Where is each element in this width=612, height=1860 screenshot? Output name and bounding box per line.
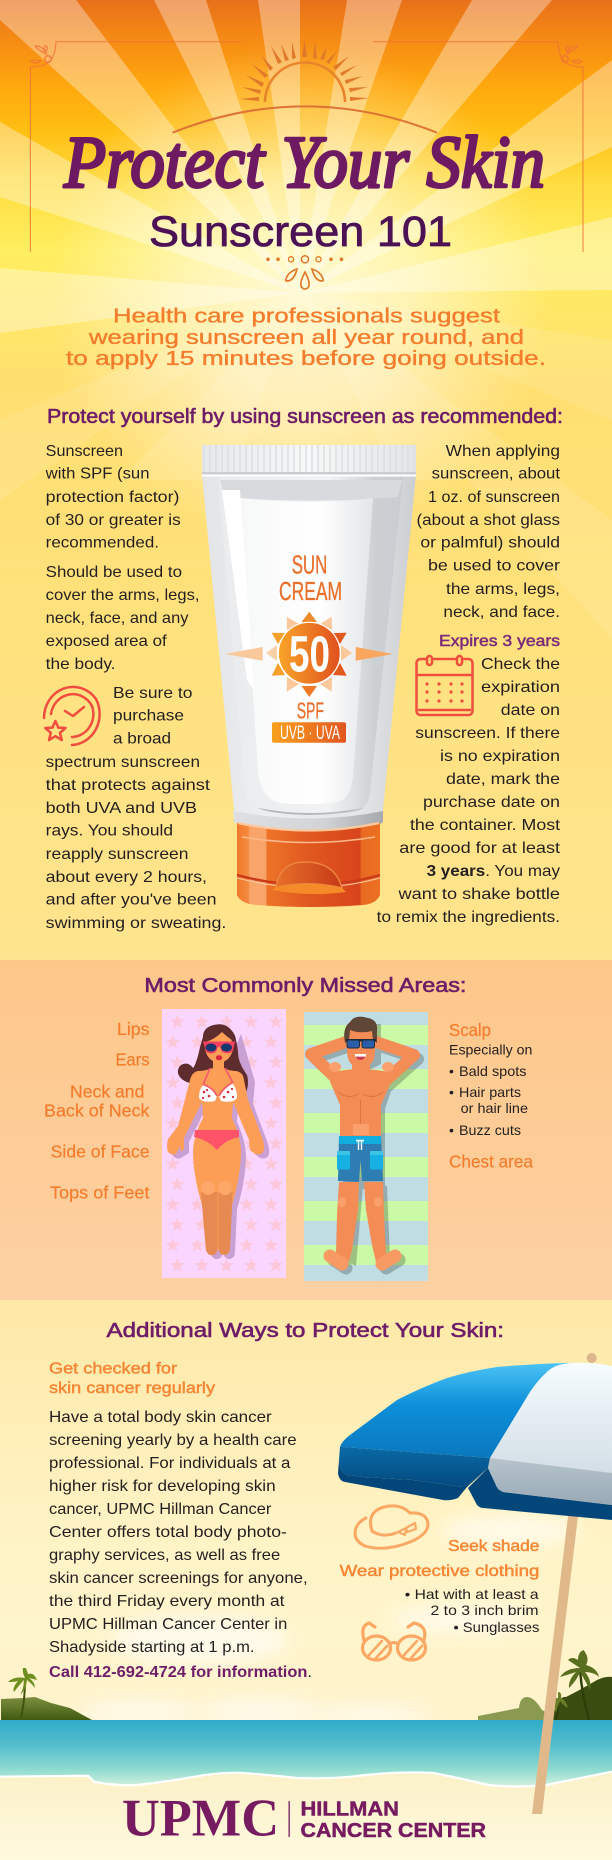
subheading: get checked: skin cancer regularly — [49, 1380, 215, 1397]
woman lower legs — [201, 1192, 233, 1255]
left labels: Lips — [117, 1019, 150, 1039]
bikini bottom — [194, 1130, 239, 1150]
heading: protect yourself: Protect yourself by using sunscreen as recommended: — [47, 406, 563, 428]
panel: most commonly missed areas background — [0, 960, 612, 1300]
man torso — [330, 1069, 392, 1137]
text: seek shade and wear protective clothing: • Hat with at least a — [405, 1586, 539, 1602]
screening text: cancer, UPMC Hillman Cancer — [49, 1501, 272, 1518]
tube crimp — [202, 445, 416, 476]
left column text: the body. — [46, 656, 116, 673]
swim shorts — [337, 1136, 383, 1182]
sunscreen tube — [202, 445, 416, 907]
right labels: or hair line — [461, 1100, 528, 1116]
panel: hero sunburst background — [0, 0, 612, 960]
left column text: with SPF (sun — [45, 466, 150, 483]
sea — [0, 1720, 612, 1786]
left column text: recommended. — [46, 534, 159, 552]
right column text — [377, 443, 561, 926]
text: sun cream: SUN — [292, 549, 327, 579]
left labels: Back of Neck — [44, 1101, 150, 1121]
right labels: Bald spots — [459, 1063, 526, 1079]
text: seek shade and wear protective clothing: Seek shade — [448, 1538, 540, 1555]
right column text: sunscreen. If there — [415, 725, 560, 742]
icon: sun hat — [355, 1506, 428, 1548]
subheading: get checked — [49, 1361, 215, 1397]
umbrella white panel — [490, 1363, 612, 1473]
woman fringe — [203, 1026, 236, 1042]
right column text: date on — [501, 702, 560, 719]
left column text: Sunscreen — [46, 443, 123, 460]
left column text: a broad — [113, 731, 171, 748]
beach scene — [0, 1650, 612, 1860]
screening text — [49, 1409, 312, 1681]
man arms — [311, 1042, 414, 1082]
screening text: the third Friday every month at — [49, 1593, 285, 1610]
man sunglasses — [346, 1039, 376, 1048]
man neck and face — [347, 1030, 375, 1074]
right labels — [449, 1020, 533, 1172]
striped towel — [304, 1012, 428, 1281]
left column text: exposed area of — [46, 633, 167, 650]
screening text: screening yearly by a health care — [49, 1432, 297, 1449]
woman hair — [178, 1024, 248, 1092]
umbrella pole — [532, 1353, 597, 1814]
UPMC wordmark: UPMC — [122, 1790, 279, 1848]
left column text: that protects against — [46, 777, 211, 794]
towel with stars — [162, 1009, 286, 1278]
panel: additional ways background — [0, 1300, 612, 1726]
heading: missed areas: Most Commonly Missed Areas: — [144, 975, 466, 997]
left column text: and after you've been — [46, 892, 217, 909]
logo: UPMC Hillman Cancer Center: HILLMAN — [300, 1798, 399, 1820]
intro text — [66, 305, 546, 370]
woman shadow — [172, 1034, 269, 1259]
text: sun cream: CREAM — [279, 576, 342, 606]
screening text: Call 412-692-4724 for information . — [49, 1664, 312, 1681]
ornament under subtitle — [266, 256, 343, 289]
tube lower band — [233, 811, 383, 833]
left column text: about every 2 hours, — [46, 869, 207, 886]
left column text: spectrum sunscreen — [46, 754, 200, 771]
woman body — [167, 1058, 264, 1255]
right column text: the arms, legs, — [446, 581, 560, 598]
left column text: protection factor) — [46, 489, 180, 506]
right column text: be used to cover — [428, 558, 561, 575]
woman sunglasses — [203, 1042, 235, 1054]
icon: rising sun — [172, 39, 437, 133]
right column text: When applying — [446, 443, 560, 460]
right column text: neck, and face. — [443, 604, 560, 621]
tube cap — [237, 823, 380, 907]
text: seek shade and wear protective clothing: 2 to 3 inch brim — [430, 1602, 538, 1618]
man hair — [344, 1017, 377, 1043]
screening text: Have a total body skin cancer — [49, 1409, 272, 1426]
left column text — [45, 443, 226, 932]
right column text: to remix the ingredients. — [377, 909, 560, 926]
logo: UPMC Hillman Cancer Center: CANCER CENTER — [300, 1820, 487, 1842]
woman mouth — [216, 1055, 222, 1060]
subtitle: Sunscreen 101 — [149, 208, 452, 256]
header frame ornament left — [30, 42, 241, 252]
icon: sunglasses — [362, 1623, 426, 1660]
right labels: • — [449, 1122, 454, 1138]
text: seek shade and wear protective clothing: Wear protective clothing — [340, 1563, 539, 1580]
island left with palm — [1, 1668, 92, 1720]
screening text: UPMC Hillman Cancer Center in — [49, 1616, 287, 1633]
right labels: • — [449, 1063, 454, 1079]
left column text: cover the arms, legs, — [46, 587, 200, 604]
right labels: • — [449, 1084, 454, 1100]
woman knees — [201, 1181, 232, 1195]
left column text: neck, face, and any — [46, 610, 189, 627]
left column text: purchase — [113, 708, 184, 725]
intro text: Health care professionals suggest — [113, 305, 500, 328]
chest and abs lines — [338, 1092, 383, 1135]
right column text: are good for at least — [399, 840, 561, 857]
umbrella blue panel — [340, 1363, 575, 1458]
left column text: of 30 or greater is — [46, 512, 181, 529]
left column text: reapply sunscreen — [46, 846, 189, 863]
left column text: swimming or sweating. — [46, 915, 226, 932]
right labels: Scalp — [449, 1020, 491, 1040]
left labels: Side of Face — [51, 1142, 150, 1162]
left labels: Neck and — [70, 1082, 144, 1102]
tag: UVB UVA — [272, 722, 346, 744]
umbrella white valance — [488, 1458, 612, 1505]
screening text: higher risk for developing skin — [49, 1478, 276, 1495]
bikini top — [199, 1068, 237, 1102]
man mouth — [355, 1054, 366, 1060]
right column text: or palmful) should — [420, 534, 560, 552]
sand — [0, 1772, 612, 1860]
subheading: get checked: Get checked for — [49, 1361, 178, 1378]
screening text: professional. For individuals at a — [49, 1455, 291, 1472]
umbrella dark underside — [338, 1460, 612, 1520]
right column text: the container. Most — [410, 817, 561, 834]
text: SPF: SPF — [297, 697, 324, 723]
man knees — [338, 1197, 382, 1207]
left column text: rays. You should — [46, 823, 173, 840]
screening text: skin cancer screenings for anyone, — [49, 1570, 308, 1587]
island right with palms — [478, 1650, 612, 1720]
right column text: (about a shot glass — [416, 512, 560, 529]
right labels: Especially on — [449, 1041, 532, 1057]
text: seek shade and wear protective clothing — [340, 1538, 540, 1635]
icon: SPF 50 sun — [225, 612, 393, 697]
text: sun cream — [279, 549, 342, 606]
right labels: Chest area — [449, 1152, 533, 1172]
icon: SPF 50 sun: 50 — [289, 626, 330, 682]
icon: clock with star — [44, 687, 100, 745]
screening text: Shadyside starting at 1 p.m. — [49, 1639, 254, 1656]
tube body — [202, 475, 416, 833]
right column text: sunscreen, about — [432, 466, 561, 483]
beach umbrella — [338, 1353, 612, 1814]
left column text: both UVA and UVB — [46, 800, 197, 817]
right column text: 1 oz. of sunscreen — [428, 489, 560, 506]
right column text: Check the — [481, 656, 560, 673]
intro text: wearing sunscreen all year round, and — [88, 326, 524, 349]
intro text: to apply 15 minutes before going outside. — [66, 347, 546, 370]
right column text: purchase date on — [423, 794, 560, 811]
man legs — [336, 1182, 386, 1262]
right column text: Expires 3 years — [439, 633, 560, 650]
left column text: Be sure to — [113, 685, 193, 702]
man on towel — [304, 1012, 428, 1281]
screening text: Center offers total body photo- — [49, 1524, 287, 1541]
man shadow — [315, 1024, 418, 1268]
title: Protect Your Skin — [63, 122, 545, 204]
left column text: Should be used to — [46, 564, 182, 581]
icon: calendar — [416, 656, 472, 715]
right column text: 3 years. You may — [427, 863, 560, 880]
left labels — [44, 1019, 150, 1203]
header frame ornament right — [373, 42, 583, 252]
heading: additional ways: Additional Ways to Protect Your Skin: — [106, 1320, 504, 1342]
logo: UPMC Hillman Cancer Center — [122, 1790, 487, 1848]
right column text: date, mark the — [446, 771, 560, 788]
right column text: is no expiration — [440, 748, 560, 765]
left labels: Tops of Feet — [50, 1183, 150, 1203]
left labels: Ears — [116, 1050, 150, 1070]
tag: UVB UVA: UVB · UVA — [280, 723, 340, 744]
man feet — [330, 1256, 395, 1264]
text: seek shade and wear protective clothing: • Sunglasses — [454, 1619, 539, 1635]
screening text: graphy services, as well as free — [49, 1547, 280, 1564]
shoulder highlights — [329, 1062, 394, 1072]
woman face — [205, 1032, 233, 1062]
right column text: expiration — [481, 679, 560, 696]
right labels: Buzz cuts — [459, 1122, 521, 1138]
right labels: Hair parts — [459, 1084, 521, 1100]
surf line — [0, 1772, 612, 1786]
right column text: want to shake bottle — [397, 886, 560, 903]
woman on towel — [162, 1009, 286, 1278]
umbrella blue valance — [339, 1447, 490, 1486]
